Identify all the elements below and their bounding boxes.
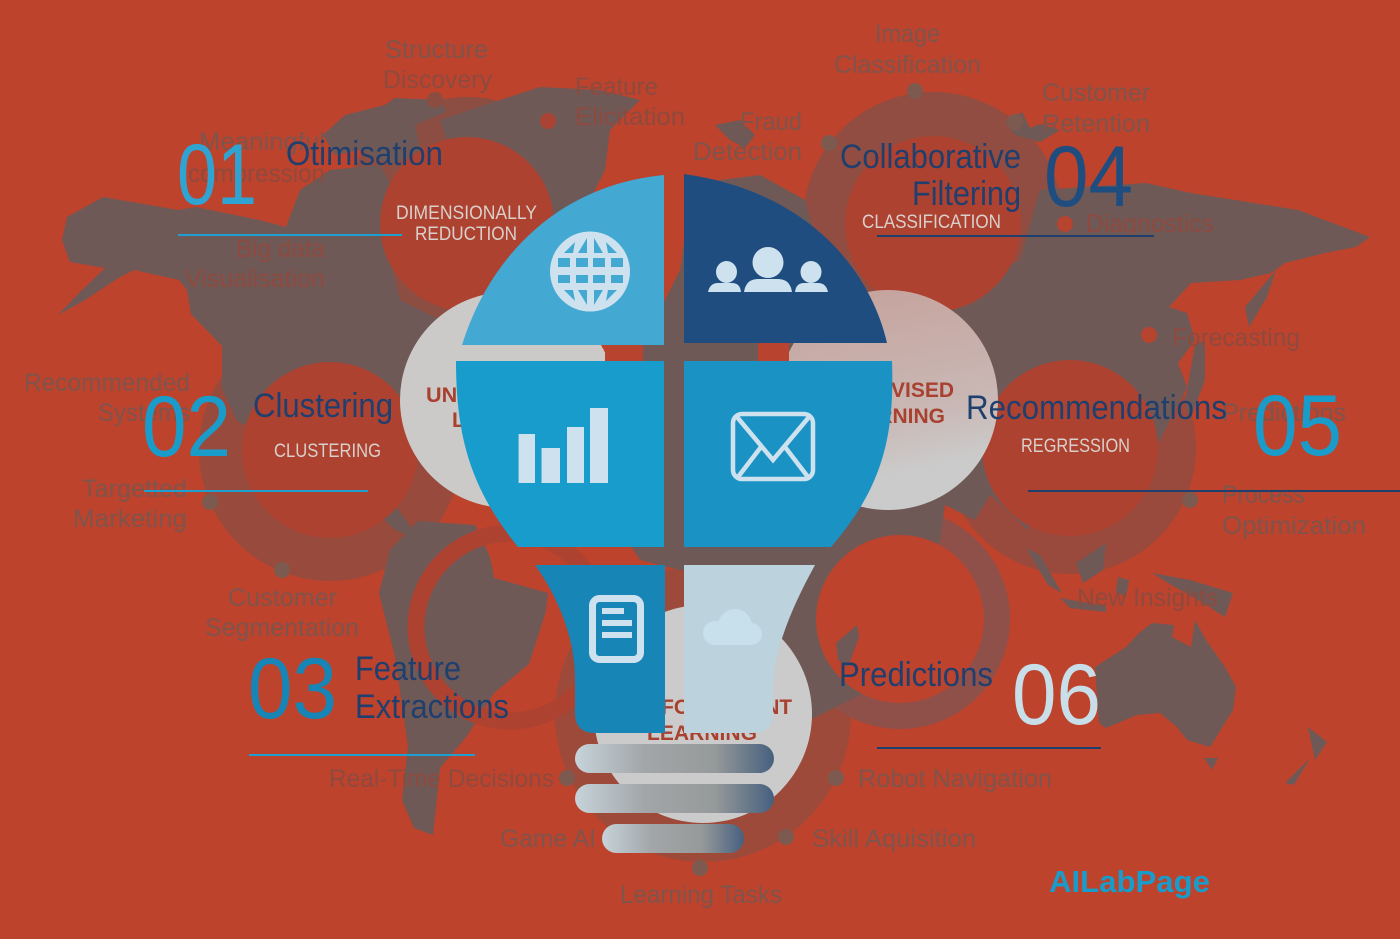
map: Sulawesi — [1116, 577, 1129, 597]
map: Japan — [1185, 340, 1205, 420]
section 03: Extractions — [355, 688, 509, 726]
map: Pacific island chain — [1245, 270, 1276, 327]
map: Borneo — [1076, 543, 1106, 583]
bulb panel: globe — [462, 175, 664, 345]
circle: reinforcement learning — [594, 605, 812, 823]
section 02 — [142, 379, 393, 492]
topic circle 01 — [380, 137, 554, 311]
section 06: Predictions — [839, 656, 993, 694]
circle: supervised learning: LEARNING — [835, 405, 945, 428]
map: Australia — [1095, 620, 1236, 747]
map: Tasmania — [1204, 758, 1218, 770]
map labels: Big data — [236, 235, 325, 263]
bulb panel: bar chart — [456, 361, 664, 547]
map labels: New Insights — [1077, 584, 1218, 612]
map labels: Visualisation — [185, 265, 325, 293]
icon: globe — [550, 232, 630, 312]
map labels: Customer — [1042, 79, 1150, 107]
section 05: REGRESSION — [1021, 436, 1130, 457]
map labels: Retention — [1042, 110, 1150, 138]
map: Java — [1060, 598, 1106, 612]
icon: bar chart — [519, 408, 608, 483]
topic circle 05 — [982, 360, 1158, 536]
section 04: CLASSIFICATION — [862, 212, 1001, 233]
circle: unsupervised learning: LEARNING — [452, 409, 562, 432]
map labels: Marketing — [73, 505, 187, 533]
icon: cloud — [703, 609, 762, 645]
map labels: Learning Tasks — [620, 881, 782, 909]
icon: people — [708, 247, 828, 292]
map labels: Structure — [385, 36, 488, 64]
map: Madagascar — [836, 625, 859, 667]
map labels: Classification — [834, 51, 981, 79]
map labels: Forecasting — [1172, 324, 1300, 352]
map labels: Process — [1222, 481, 1305, 509]
topic ring 03 — [416, 533, 604, 721]
map labels: Recommended — [24, 369, 190, 397]
bulb panel: mail — [684, 361, 892, 547]
map labels: Systems — [98, 399, 190, 427]
bulb neck left: document — [535, 565, 665, 733]
map: New Zealand south — [1285, 758, 1310, 785]
map labels: Targetted — [82, 475, 187, 503]
circle: supervised learning — [778, 290, 998, 510]
map labels: compression — [188, 160, 325, 188]
map: Iceland — [715, 120, 755, 148]
map labels: Predictions — [1222, 399, 1346, 427]
speckled outer rings — [199, 92, 1196, 862]
section 02: 02 — [142, 379, 231, 475]
map labels: Feature — [575, 73, 658, 101]
map labels: Detection — [693, 138, 802, 166]
map: Eurasia and Africa — [590, 175, 1370, 720]
section 03 — [248, 641, 509, 756]
map labels: Meaningful — [199, 128, 325, 156]
circle backgrounds for topics — [242, 136, 1158, 721]
bulb screw base — [575, 744, 774, 853]
map: North America — [58, 165, 480, 540]
map labels: Robot Navigation — [858, 765, 1052, 793]
map labels: Fraud — [740, 108, 802, 136]
map labels: Segmentation — [205, 614, 359, 642]
world map — [58, 87, 1370, 835]
circle: reinforcement learning: LEARNING — [647, 722, 757, 745]
map: South America — [379, 521, 548, 835]
icon: envelope — [733, 414, 813, 479]
topic circle 04 — [845, 136, 1021, 312]
credit: AILabPage: AILabPage — [1049, 864, 1210, 899]
section 01: DIMENSIONALLY — [396, 203, 537, 224]
section 04: 04 — [1044, 129, 1133, 225]
section 05: Recommendations — [966, 389, 1227, 427]
map labels: Diagnostics — [1086, 210, 1214, 238]
bulb panel: people — [684, 174, 887, 343]
map labels: Game AI — [500, 825, 596, 853]
section 01 — [177, 127, 537, 245]
topic circle 06 — [816, 535, 984, 703]
circle: reinforcement learning: REINFORCEMENT — [612, 696, 792, 719]
section 06 — [839, 647, 1101, 749]
section 01: Otimisation — [286, 135, 443, 173]
section 01: REDUCTION — [415, 224, 517, 245]
circle: unsupervised learning: UNSUPERVISED — [426, 384, 596, 407]
section 05 — [966, 378, 1400, 492]
topic circle 02 — [242, 362, 418, 538]
map labels: Skill Aquisition — [812, 825, 976, 853]
circle: supervised learning: SUPERVISED — [819, 379, 954, 402]
section 05: 05 — [1253, 378, 1342, 474]
map: Sumatra — [1026, 548, 1062, 593]
map: Greenland — [440, 87, 640, 240]
map labels: Optimization — [1222, 512, 1366, 540]
icon: document — [592, 598, 640, 660]
map: New Zealand north — [1308, 727, 1327, 760]
section 02: Clustering — [253, 387, 393, 425]
map location dots — [202, 83, 1198, 876]
map labels: Elicitation — [575, 103, 685, 131]
map: Arctic islands — [323, 98, 446, 165]
map labels: Discovery — [383, 66, 492, 94]
section 04: Filtering — [912, 175, 1021, 213]
section 06: 06 — [1012, 647, 1101, 743]
section 04 — [840, 129, 1154, 237]
section 01: 01 — [177, 127, 257, 223]
bulb neck right: cloud — [684, 565, 815, 733]
section 03: Feature — [355, 650, 461, 688]
map: Arctic archipelago — [1005, 112, 1060, 142]
section 03: 03 — [248, 641, 337, 737]
map: New Guinea — [1152, 573, 1233, 617]
section 04: Collaborative — [840, 138, 1021, 176]
map labels: Customer — [228, 584, 337, 612]
circle: unsupervised learning — [400, 292, 616, 508]
section 02: CLUSTERING — [274, 441, 381, 462]
map labels: Image — [875, 20, 940, 48]
red gaps between bulb panels — [605, 343, 789, 361]
map labels: Real-Time Decisions — [329, 765, 554, 793]
